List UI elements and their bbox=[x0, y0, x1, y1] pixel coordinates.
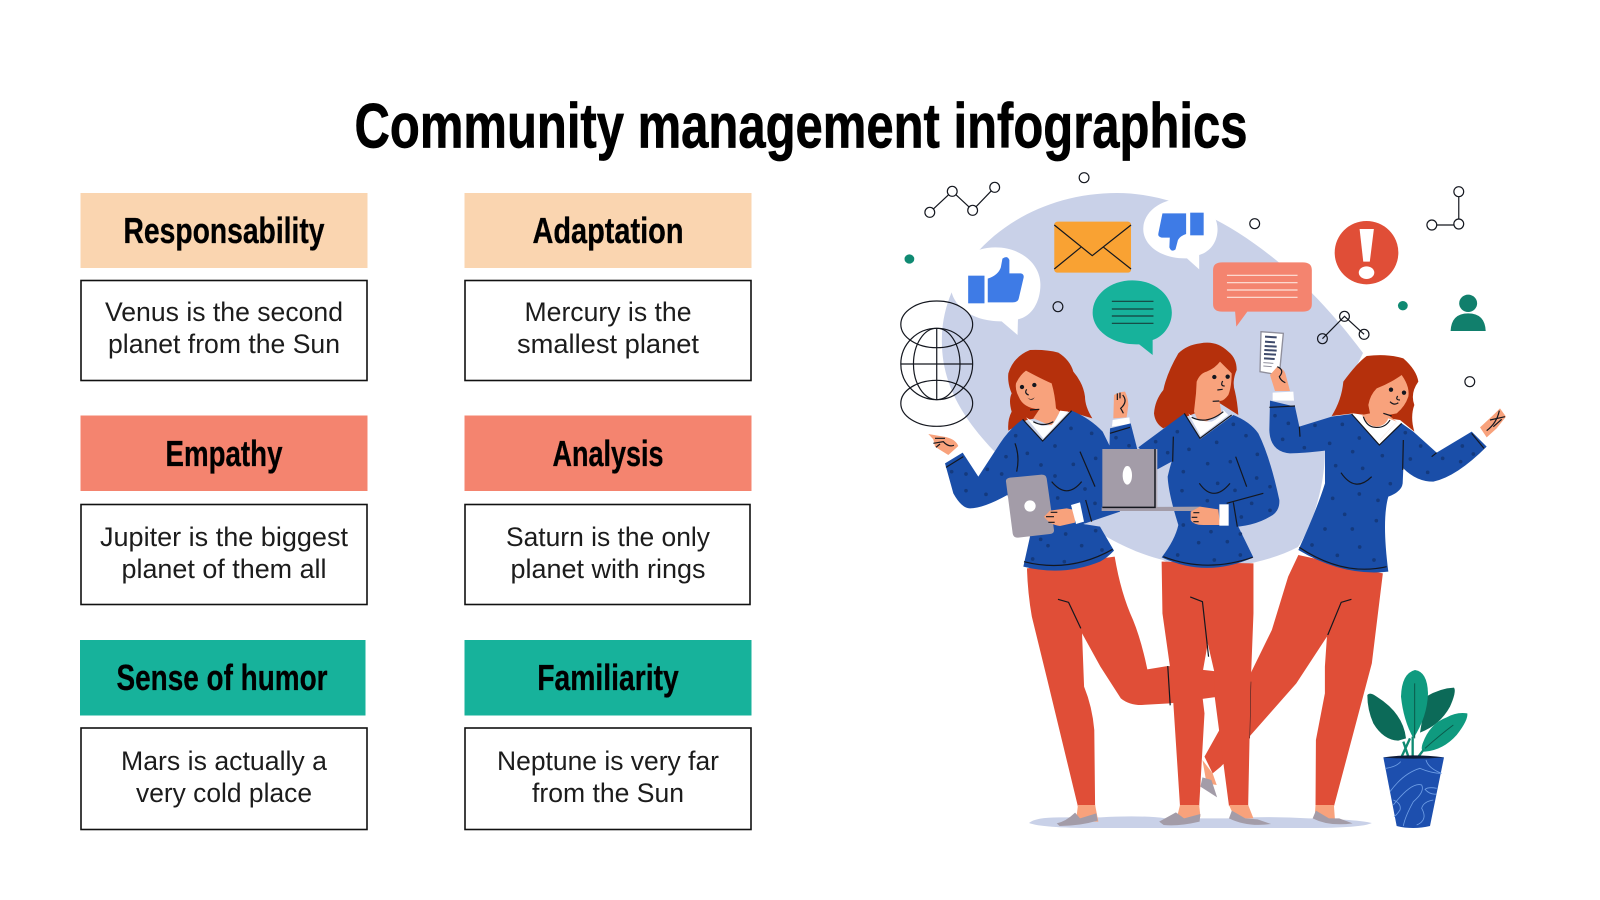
panel: Analysis bbox=[464, 416, 752, 604]
text block: Venus: planet from the Sun bbox=[108, 329, 340, 359]
icon: alert bbox=[1335, 221, 1398, 284]
text block: Neptune bbox=[465, 728, 751, 830]
heading: Responsability bbox=[80, 193, 368, 268]
legs and shoe bbox=[1027, 557, 1219, 826]
illustration: community team bbox=[901, 173, 1506, 828]
icon: network top right bbox=[1427, 187, 1464, 230]
figure: woman right bbox=[1200, 332, 1506, 824]
green dots bbox=[904, 254, 1408, 310]
text block: Saturn: Saturn is the only bbox=[506, 522, 710, 552]
panel: Familiarity bbox=[464, 640, 752, 830]
icon: person bbox=[1451, 295, 1486, 331]
panel: Responsability bbox=[80, 193, 368, 380]
text block: Saturn: planet with rings bbox=[510, 554, 706, 584]
icon: globe bbox=[901, 301, 973, 426]
heading: Responsability: Responsability bbox=[124, 210, 324, 251]
text block: Saturn bbox=[465, 504, 750, 604]
heading: Empathy bbox=[80, 416, 368, 491]
text block: Jupiter bbox=[81, 504, 367, 604]
icon: green speech bubble bbox=[1093, 280, 1172, 355]
title: Community management infographics bbox=[354, 92, 1248, 162]
upper body bbox=[1109, 343, 1279, 568]
upper body bbox=[928, 350, 1120, 571]
text block: Neptune: from the Sun bbox=[532, 778, 684, 808]
text block: Venus bbox=[81, 280, 367, 380]
small circles bbox=[1053, 173, 1475, 387]
text block: Jupiter: planet of them all bbox=[122, 554, 326, 584]
heading: Analysis: Analysis bbox=[552, 433, 664, 474]
text block: Mercury bbox=[465, 280, 751, 380]
icon: salmon speech bubble bbox=[1213, 262, 1312, 327]
plant in pot bbox=[1367, 670, 1467, 828]
text block: Mars bbox=[81, 728, 367, 830]
heading: Adaptation: Adaptation bbox=[532, 210, 684, 251]
text block: Venus: Venus is the second bbox=[105, 297, 343, 327]
panel: Empathy bbox=[80, 416, 368, 604]
heading: Adaptation bbox=[464, 193, 752, 268]
icon: network middle bbox=[1318, 311, 1369, 344]
text block: Mars: very cold place bbox=[136, 778, 312, 808]
heading: Analysis bbox=[464, 416, 752, 491]
panel: Adaptation bbox=[464, 193, 752, 380]
text block: Jupiter: Jupiter is the biggest bbox=[100, 522, 348, 552]
legs and shoes bbox=[1159, 562, 1271, 825]
text block: Mercury: smallest planet bbox=[517, 329, 699, 359]
icons cluster bbox=[901, 173, 1486, 828]
background blob bbox=[942, 193, 1363, 568]
legs and shoes bbox=[1200, 555, 1383, 824]
icon: envelope bbox=[1054, 222, 1131, 273]
figure: woman left bbox=[928, 350, 1219, 826]
heading: Familiarity: Familiarity bbox=[537, 657, 679, 698]
heading: Empathy: Empathy bbox=[166, 433, 282, 474]
text block: Neptune: Neptune is very far bbox=[497, 746, 719, 776]
icon: network top left bbox=[925, 182, 1000, 217]
figure: woman centre bbox=[1109, 343, 1279, 825]
heading: Sense of humor bbox=[80, 640, 366, 716]
text block: Mercury: Mercury is the bbox=[524, 297, 692, 327]
device: laptop held by centre woman bbox=[1102, 449, 1229, 526]
device: tablet held by left woman bbox=[1006, 475, 1084, 538]
icon: thumbs up bubble bbox=[951, 247, 1040, 335]
icon: thumbs down bubble bbox=[1143, 199, 1218, 269]
panel: Sense of humor bbox=[80, 640, 367, 830]
ground shadow bbox=[1029, 816, 1372, 828]
heading: Sense of humor: Sense of humor bbox=[116, 657, 328, 698]
upper body bbox=[1260, 332, 1506, 572]
text block: Mars: Mars is actually a bbox=[121, 746, 328, 776]
heading: Familiarity bbox=[464, 640, 752, 716]
